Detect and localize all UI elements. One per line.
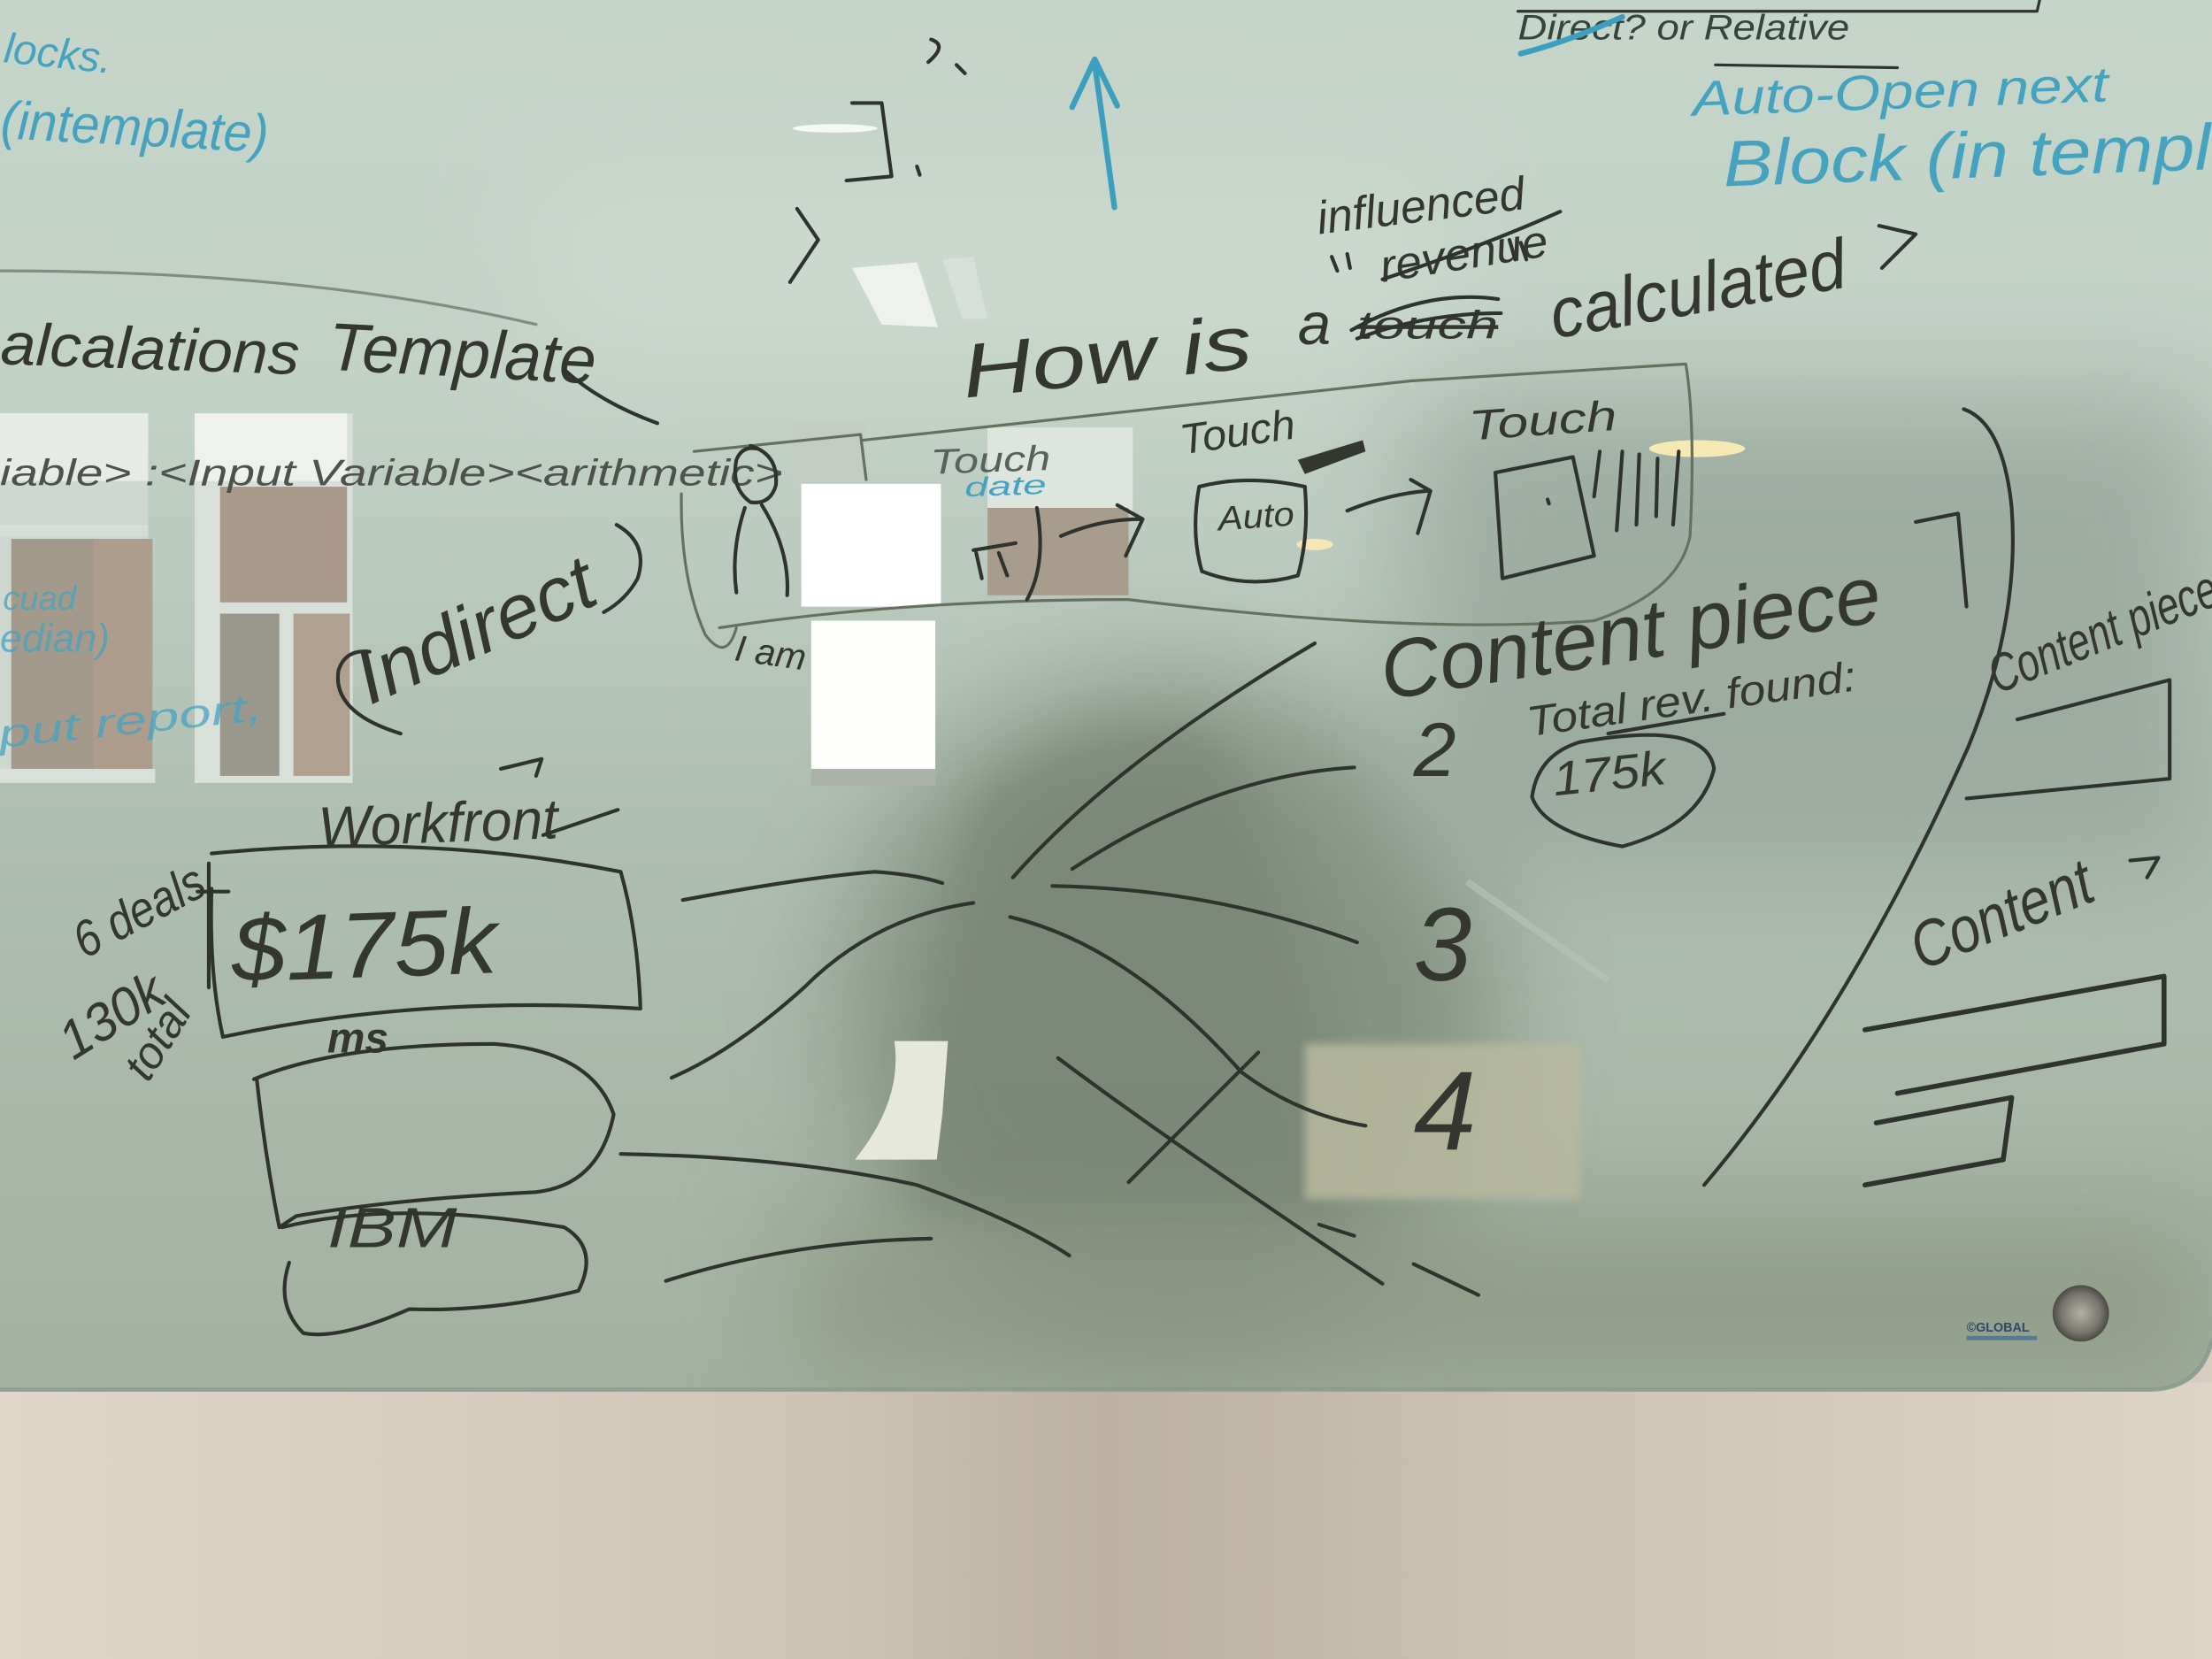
second touch with auto box: Touch [1177, 402, 1298, 464]
label: content piece: Content piece [1374, 548, 1887, 718]
blue notes top left [0, 25, 270, 164]
wall below the board [0, 1382, 2212, 1659]
workfront box with 175k [197, 846, 641, 1037]
reflected window: left [0, 413, 155, 783]
arrow to third touch [1348, 480, 1431, 534]
heading: how is a touch calculated: calculated [1544, 224, 1854, 353]
first touch: Touch [930, 439, 1051, 482]
annotation: influenced revenue: revenue [1376, 216, 1551, 292]
content numbers 2, 3, 4 [1413, 708, 1477, 1174]
note: direct or relative [1518, 0, 2041, 68]
large right bracket curve [1704, 409, 2013, 1185]
side labels: 6 deals and 130k total: 130k [48, 958, 177, 1071]
faint blue notes on left window: put report, [0, 686, 265, 757]
note: total revenue found: Total rev. found: [1524, 654, 1859, 746]
heading: how is a touch calculated: a [1298, 291, 1331, 357]
reflected ceiling lights and floor highlights [793, 124, 1745, 1199]
note: direct or relative: Direct? or Relative [1518, 9, 1849, 48]
third touch with tally lines: Touch [1467, 393, 1618, 449]
arrow to second touch [1061, 505, 1142, 556]
heading: how is a touch calculated [958, 224, 1916, 415]
person figure: I am [733, 627, 809, 678]
person figure [733, 446, 809, 678]
blue notes top left: locks. [2, 25, 114, 83]
bracket and code marks at top [790, 40, 965, 282]
first touch [930, 439, 1051, 600]
circled value 175k: 175k [1550, 741, 1671, 806]
global logo [1967, 1321, 2037, 1340]
global logo: ©GLOBAL [1967, 1321, 2030, 1335]
microsoft shape [254, 1044, 614, 1227]
annotation: influenced revenue: influenced [1314, 167, 1529, 245]
blue note: auto-open next block [1688, 56, 2212, 200]
blue up arrow [1072, 59, 1118, 207]
room reflections in the glass [536, 183, 2212, 1389]
heading: calculations template [0, 271, 657, 423]
blue note: auto-open next block: Block (in templ [1722, 111, 2212, 200]
side labels: 6 deals and 130k total: total [113, 989, 202, 1088]
side labels: 6 deals and 130k total [48, 853, 215, 1088]
faint blue notes on left window: edian) [0, 618, 110, 661]
annotation: influenced revenue [1314, 167, 1560, 292]
circled value 175k [1532, 735, 1714, 847]
content numbers 2, 3, 4: 4 [1414, 1048, 1477, 1174]
workfront label: Workfront [317, 787, 561, 859]
heading: calculations template: Template [326, 310, 598, 399]
workfront box with 175k: $175k [229, 889, 503, 1002]
content numbers 2, 3, 4: 3 [1414, 887, 1471, 1003]
right column: content note two [1865, 844, 2164, 1185]
right column: content piece note and boxes [1967, 558, 2212, 798]
third touch with tally lines [1467, 393, 1678, 579]
heading: calculations template: alcalations [0, 311, 301, 388]
side labels: 6 deals and 130k total: 6 deals [64, 853, 215, 970]
reflected window: second [195, 413, 353, 783]
touch journey diagram outline [681, 364, 1692, 648]
ibm shape: IBM [327, 1195, 458, 1259]
first touch: date [964, 471, 1047, 503]
reflected window: bright centre [793, 423, 1133, 786]
second touch with auto box [1177, 402, 1365, 581]
right column: content note two: Content [1900, 844, 2105, 984]
label: ms: ms [327, 1015, 388, 1062]
formula line: iable> :<Input Variable><arithmetic> [0, 451, 783, 493]
faint blue notes on left window [0, 580, 265, 757]
heading: how is a touch calculated: touch [1357, 304, 1498, 348]
heading: how is a touch calculated: How is [958, 300, 1256, 415]
second touch with auto box: Auto [1215, 495, 1295, 539]
faint blue notes on left window: cuad [3, 580, 78, 618]
ibm shape [282, 1195, 587, 1334]
metal standoff knob [2053, 1285, 2109, 1341]
workfront label [317, 759, 618, 859]
label: indirect: Indirect [342, 539, 611, 721]
connector lines from accounts to content [621, 643, 1479, 1295]
blue note: auto-open next block: Auto-Open next [1688, 56, 2112, 127]
content numbers 2, 3, 4: 2 [1413, 708, 1455, 793]
blue notes top left: (intemplate) [0, 89, 270, 164]
